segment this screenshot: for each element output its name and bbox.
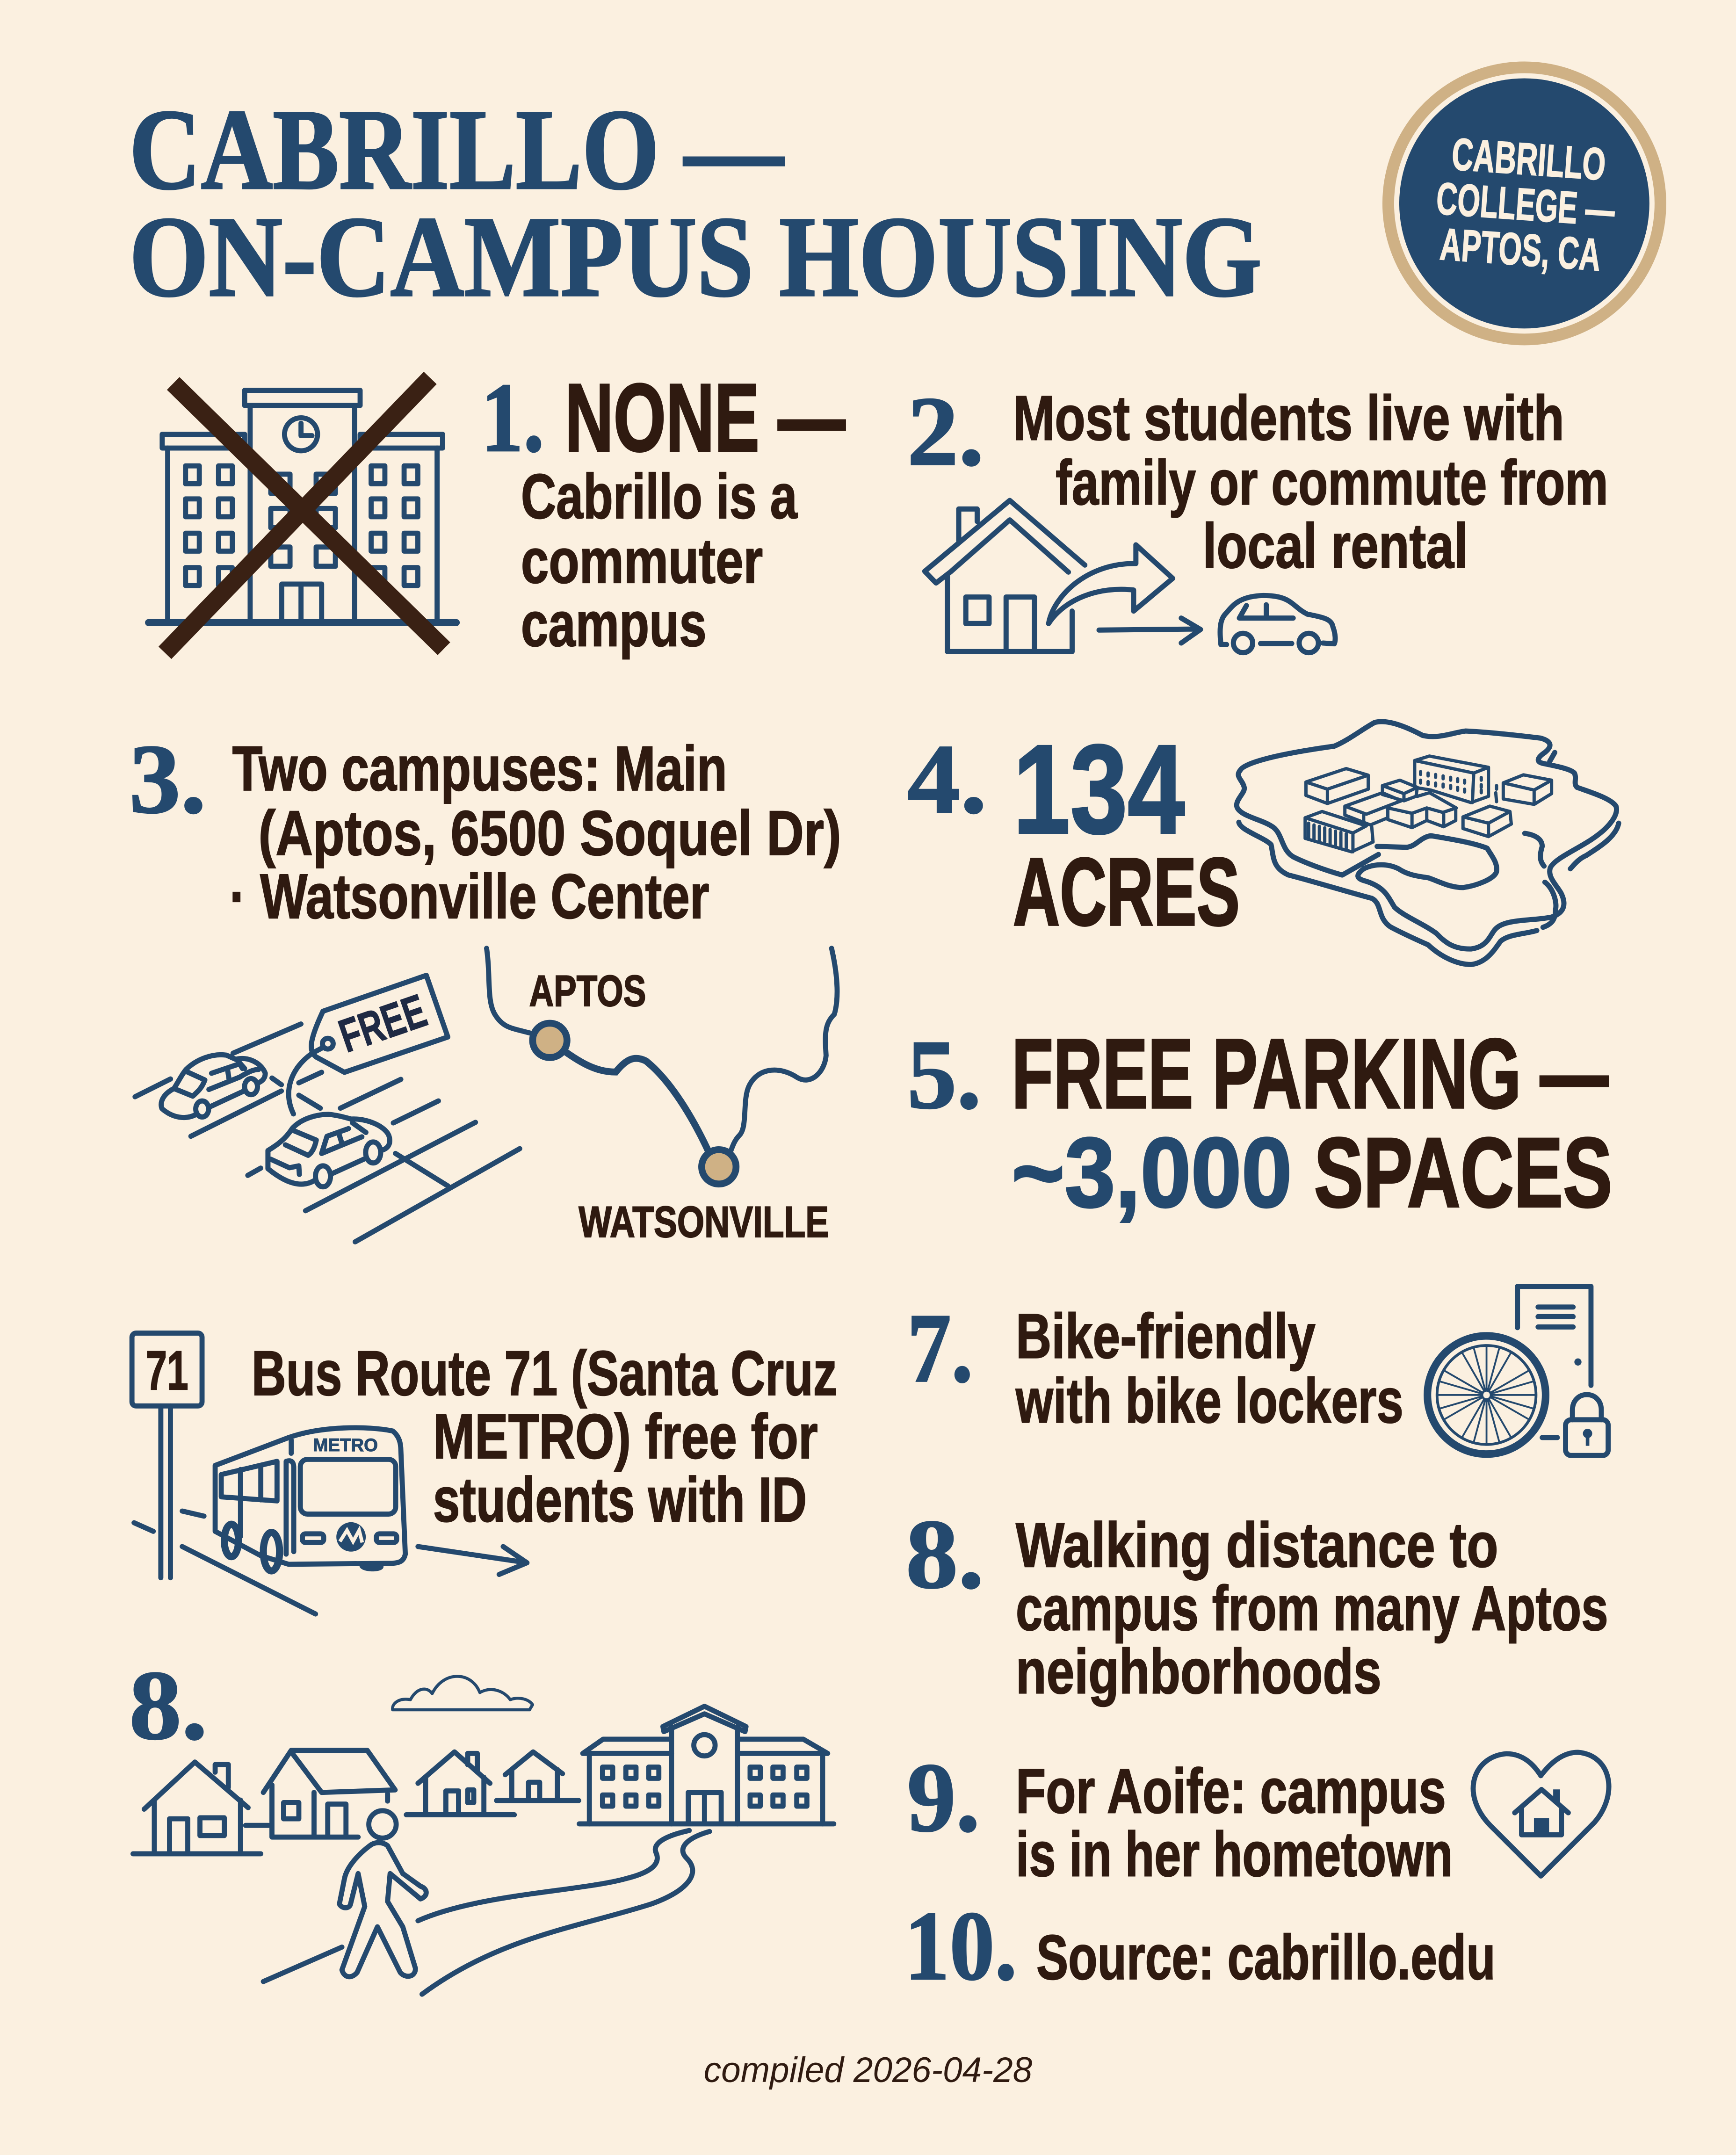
panel 3: two campuses: [129, 724, 841, 1246]
number 2: 2.: [907, 376, 984, 486]
icon: bus stop sign: [132, 1333, 202, 1578]
number 4: 4.: [907, 724, 987, 834]
illustration: houses, school and walker: [133, 1676, 834, 1994]
text: campuses: · Watsonville Center: [230, 861, 709, 932]
number 10: 10.: [904, 1891, 1017, 2001]
text: commuter campus: commuter: [521, 526, 763, 596]
icon: free parking lot: FREE: [333, 985, 433, 1063]
text: campuses: [230, 733, 841, 932]
panel 2: students commute: [907, 376, 1608, 653]
text: bike lockers: Bike-friendly: [1016, 1301, 1316, 1372]
map: Aptos to Watsonville route: APTOS: [529, 966, 646, 1015]
icon: house with arrow to car: [925, 500, 1335, 653]
icon: bike wheel and locker: [1427, 1287, 1608, 1455]
number 8 (left): 8.: [129, 1650, 208, 1760]
text: walking distance: neighborhoods: [1016, 1636, 1382, 1707]
text: live with family: [1013, 383, 1608, 581]
panel 5: free parking: [907, 1018, 1612, 1228]
icon: free parking lot: [135, 976, 520, 1242]
icon: crossed-out campus building: [148, 378, 456, 653]
panel: neighborhood walk illustration: [129, 1650, 834, 1994]
badge: Cabrillo College, Aptos CA: COLLEGE —: [1435, 173, 1617, 236]
badge: Cabrillo College, Aptos CA: APTOS, CA: [1439, 218, 1602, 281]
text: commuter campus: campus: [521, 589, 707, 659]
number 3: 3.: [129, 724, 206, 834]
icon: METRO bus: METRO: [313, 1435, 378, 1455]
icon: METRO bus: [134, 1428, 527, 1614]
text: bus route: METRO) free for: [433, 1401, 818, 1472]
text: bike lockers: [1015, 1301, 1403, 1436]
heading: none: NONE —: [565, 364, 846, 471]
map: Aptos to Watsonville route: [486, 948, 837, 1246]
number 1: 1.: [481, 362, 544, 472]
stat: 3,000 spaces: [1012, 1117, 1612, 1228]
icon: campus map outline: [1237, 722, 1619, 964]
map: Aptos to Watsonville route: WATSONVILLE: [579, 1197, 829, 1246]
text: commuter campus: [521, 461, 798, 659]
badge: Cabrillo College, Aptos CA: CABRILLO: [1450, 128, 1607, 190]
badge: Cabrillo College, Aptos CA: [1388, 67, 1660, 340]
title: ON-CAMPUS HOUSING: [129, 193, 1262, 321]
number 9: 9.: [907, 1742, 980, 1852]
text: commuter campus: Cabrillo is a: [521, 461, 798, 532]
text: hometown: [1016, 1756, 1453, 1889]
panel 6: bus route 71: [132, 1333, 837, 1614]
text: bus route: Bus Route 71 (Santa Cruz: [252, 1338, 837, 1409]
text: walking distance: [1016, 1510, 1608, 1707]
text: source: Source: cabrillo.edu: [1036, 1922, 1496, 1993]
footer: compiled date: compiled 2026-04-28: [704, 2050, 1033, 2090]
stat: 3,000 spaces: SPACES: [1314, 1117, 1612, 1228]
label: acres: ACRES: [1013, 838, 1240, 946]
icon: heart with house: [1473, 1752, 1609, 1876]
panel 4: 134 acres: [907, 719, 1619, 964]
text: campuses: Two campuses: Main: [232, 733, 727, 804]
text: hometown: is in her hometown: [1016, 1819, 1453, 1889]
panel 10: source: [904, 1891, 1496, 2001]
text: live with family: Most students live with: [1013, 383, 1564, 453]
text: bus route: [252, 1338, 837, 1535]
text: campuses: (Aptos, 6500 Soquel Dr): [259, 798, 841, 868]
panel 1: no housing: [148, 362, 846, 659]
panel 8: walking distance: [906, 1499, 1608, 1707]
text: bus route: students with ID: [433, 1464, 807, 1535]
icon: bus stop sign: 71: [146, 1340, 188, 1401]
title: [129, 86, 1262, 321]
number 8: 8.: [906, 1499, 984, 1609]
text: walking distance: Walking distance to: [1016, 1510, 1498, 1580]
stat: 3,000 spaces: ~3,000: [1012, 1117, 1292, 1228]
number 7: 7.: [907, 1293, 973, 1403]
panel 9: for Aoife: [907, 1742, 1609, 1889]
text: hometown: For Aoife: campus: [1016, 1756, 1446, 1826]
stat: 134: 134: [1013, 719, 1186, 860]
panel 7: bike friendly: [907, 1287, 1608, 1455]
title: CABRILLO —: [129, 86, 784, 214]
number 5: 5.: [907, 1020, 981, 1129]
text: bike lockers: with bike lockers: [1015, 1366, 1403, 1436]
text: live with family: local rental: [1203, 511, 1468, 581]
